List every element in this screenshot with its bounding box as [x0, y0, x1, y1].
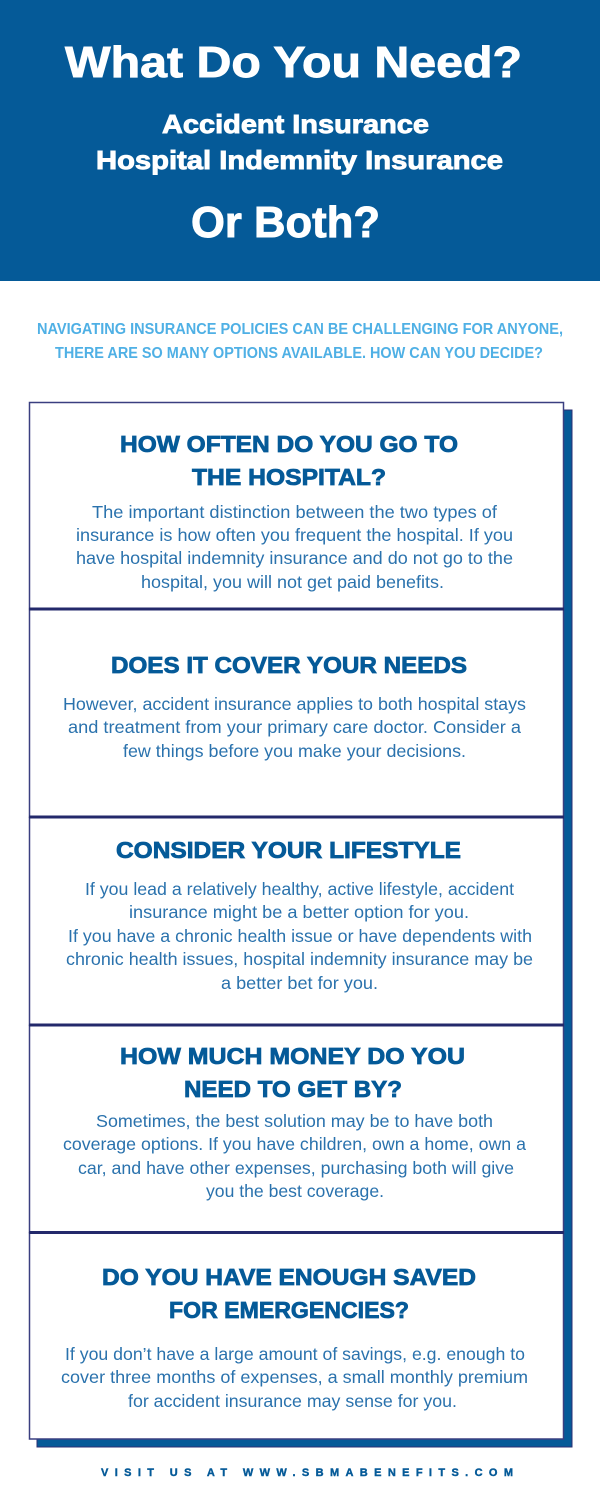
body text: how often: hospital, you will not get paid benefits. — [141, 572, 444, 592]
heading: how much money: NEED TO GET BY? — [184, 1076, 402, 1102]
intro text — [37, 321, 563, 362]
heading: how often: HOW OFTEN DO YOU GO TO — [120, 431, 458, 457]
body text: how often: insurance is how often you frequent the hospital. If you — [76, 525, 513, 545]
body text: emergencies — [61, 1344, 528, 1411]
body text: how much money — [63, 1111, 526, 1201]
heading: how much money — [120, 1043, 465, 1102]
body text: how often: The important distinction between the two types of — [92, 502, 497, 522]
subtitle: hospital indemnity insurance: Hospital Indemnity Insurance — [96, 145, 503, 175]
heading: emergencies: FOR EMERGENCIES? — [169, 1297, 409, 1323]
body text: does it cover: few things before you make your decisions. — [123, 741, 466, 761]
body text: how much money: you the best coverage. — [206, 1181, 384, 1201]
body text: emergencies: cover three months of expenses, a small monthly premium — [61, 1367, 528, 1387]
panel: does it cover your needs — [30, 610, 564, 817]
body text: lifestyle — [66, 879, 533, 993]
title: What Do You Need? — [65, 38, 522, 87]
panel: how much money — [30, 1026, 564, 1232]
intro text: NAVIGATING INSURANCE POLICIES CAN BE CHALLENGING FOR ANYONE, — [37, 321, 563, 338]
body text: how often — [76, 502, 513, 592]
body text: how much money: car, and have other expenses, purchasing both will give — [78, 1158, 514, 1178]
body text: lifestyle: If you have a chronic health issue or have dependents with — [68, 926, 532, 946]
subtitle: accident insurance: Accident Insurance — [162, 109, 429, 139]
title: or both: Or Both? — [191, 198, 380, 247]
body text: how often: have hospital indemnity insurance and do not go to the — [76, 548, 513, 568]
body text: lifestyle: chronic health issues, hospital indemnity insurance may be — [66, 949, 533, 969]
heading: does it cover: DOES IT COVER YOUR NEEDS — [111, 652, 467, 678]
footer website: VISIT US AT WWW.SBMABENEFITS.COM — [101, 1467, 513, 1479]
heading: how often — [120, 431, 458, 490]
panel: how often do you go to the hospital — [30, 402, 564, 608]
heading: how often: THE HOSPITAL? — [192, 464, 386, 490]
intro text: THERE ARE SO MANY OPTIONS AVAILABLE. HOW CAN YOU DECIDE? — [55, 345, 543, 362]
heading: emergencies — [102, 1264, 476, 1323]
body text: emergencies: for accident insurance may sense for you. — [128, 1391, 457, 1411]
heading: how much money: HOW MUCH MONEY DO YOU — [120, 1043, 465, 1069]
body text: lifestyle: insurance might be a better option for you. — [129, 902, 469, 922]
body text: does it cover: However, accident insurance applies to both hospital stays — [63, 694, 526, 714]
heading: emergencies: DO YOU HAVE ENOUGH SAVED — [102, 1264, 476, 1290]
panel: saved for emergencies — [30, 1233, 564, 1439]
card shadow — [37, 410, 572, 1447]
body text: lifestyle: If you lead a relatively healthy, active lifestyle, accident — [85, 879, 514, 899]
body text: does it cover: and treatment from your primary care doctor. Consider a — [68, 717, 521, 737]
header banner — [0, 0, 600, 281]
body text: does it cover — [63, 694, 526, 761]
heading: lifestyle: CONSIDER YOUR LIFESTYLE — [116, 837, 461, 863]
body text: emergencies: If you don’t have a large amount of savings, e.g. enough to — [65, 1344, 525, 1364]
body text: how much money: Sometimes, the best solution may be to have both — [96, 1111, 493, 1131]
panel: consider your lifestyle — [30, 818, 564, 1025]
body text: how much money: coverage options. If you have children, own a home, own a — [63, 1134, 526, 1154]
body text: lifestyle: a better bet for you. — [221, 973, 378, 993]
